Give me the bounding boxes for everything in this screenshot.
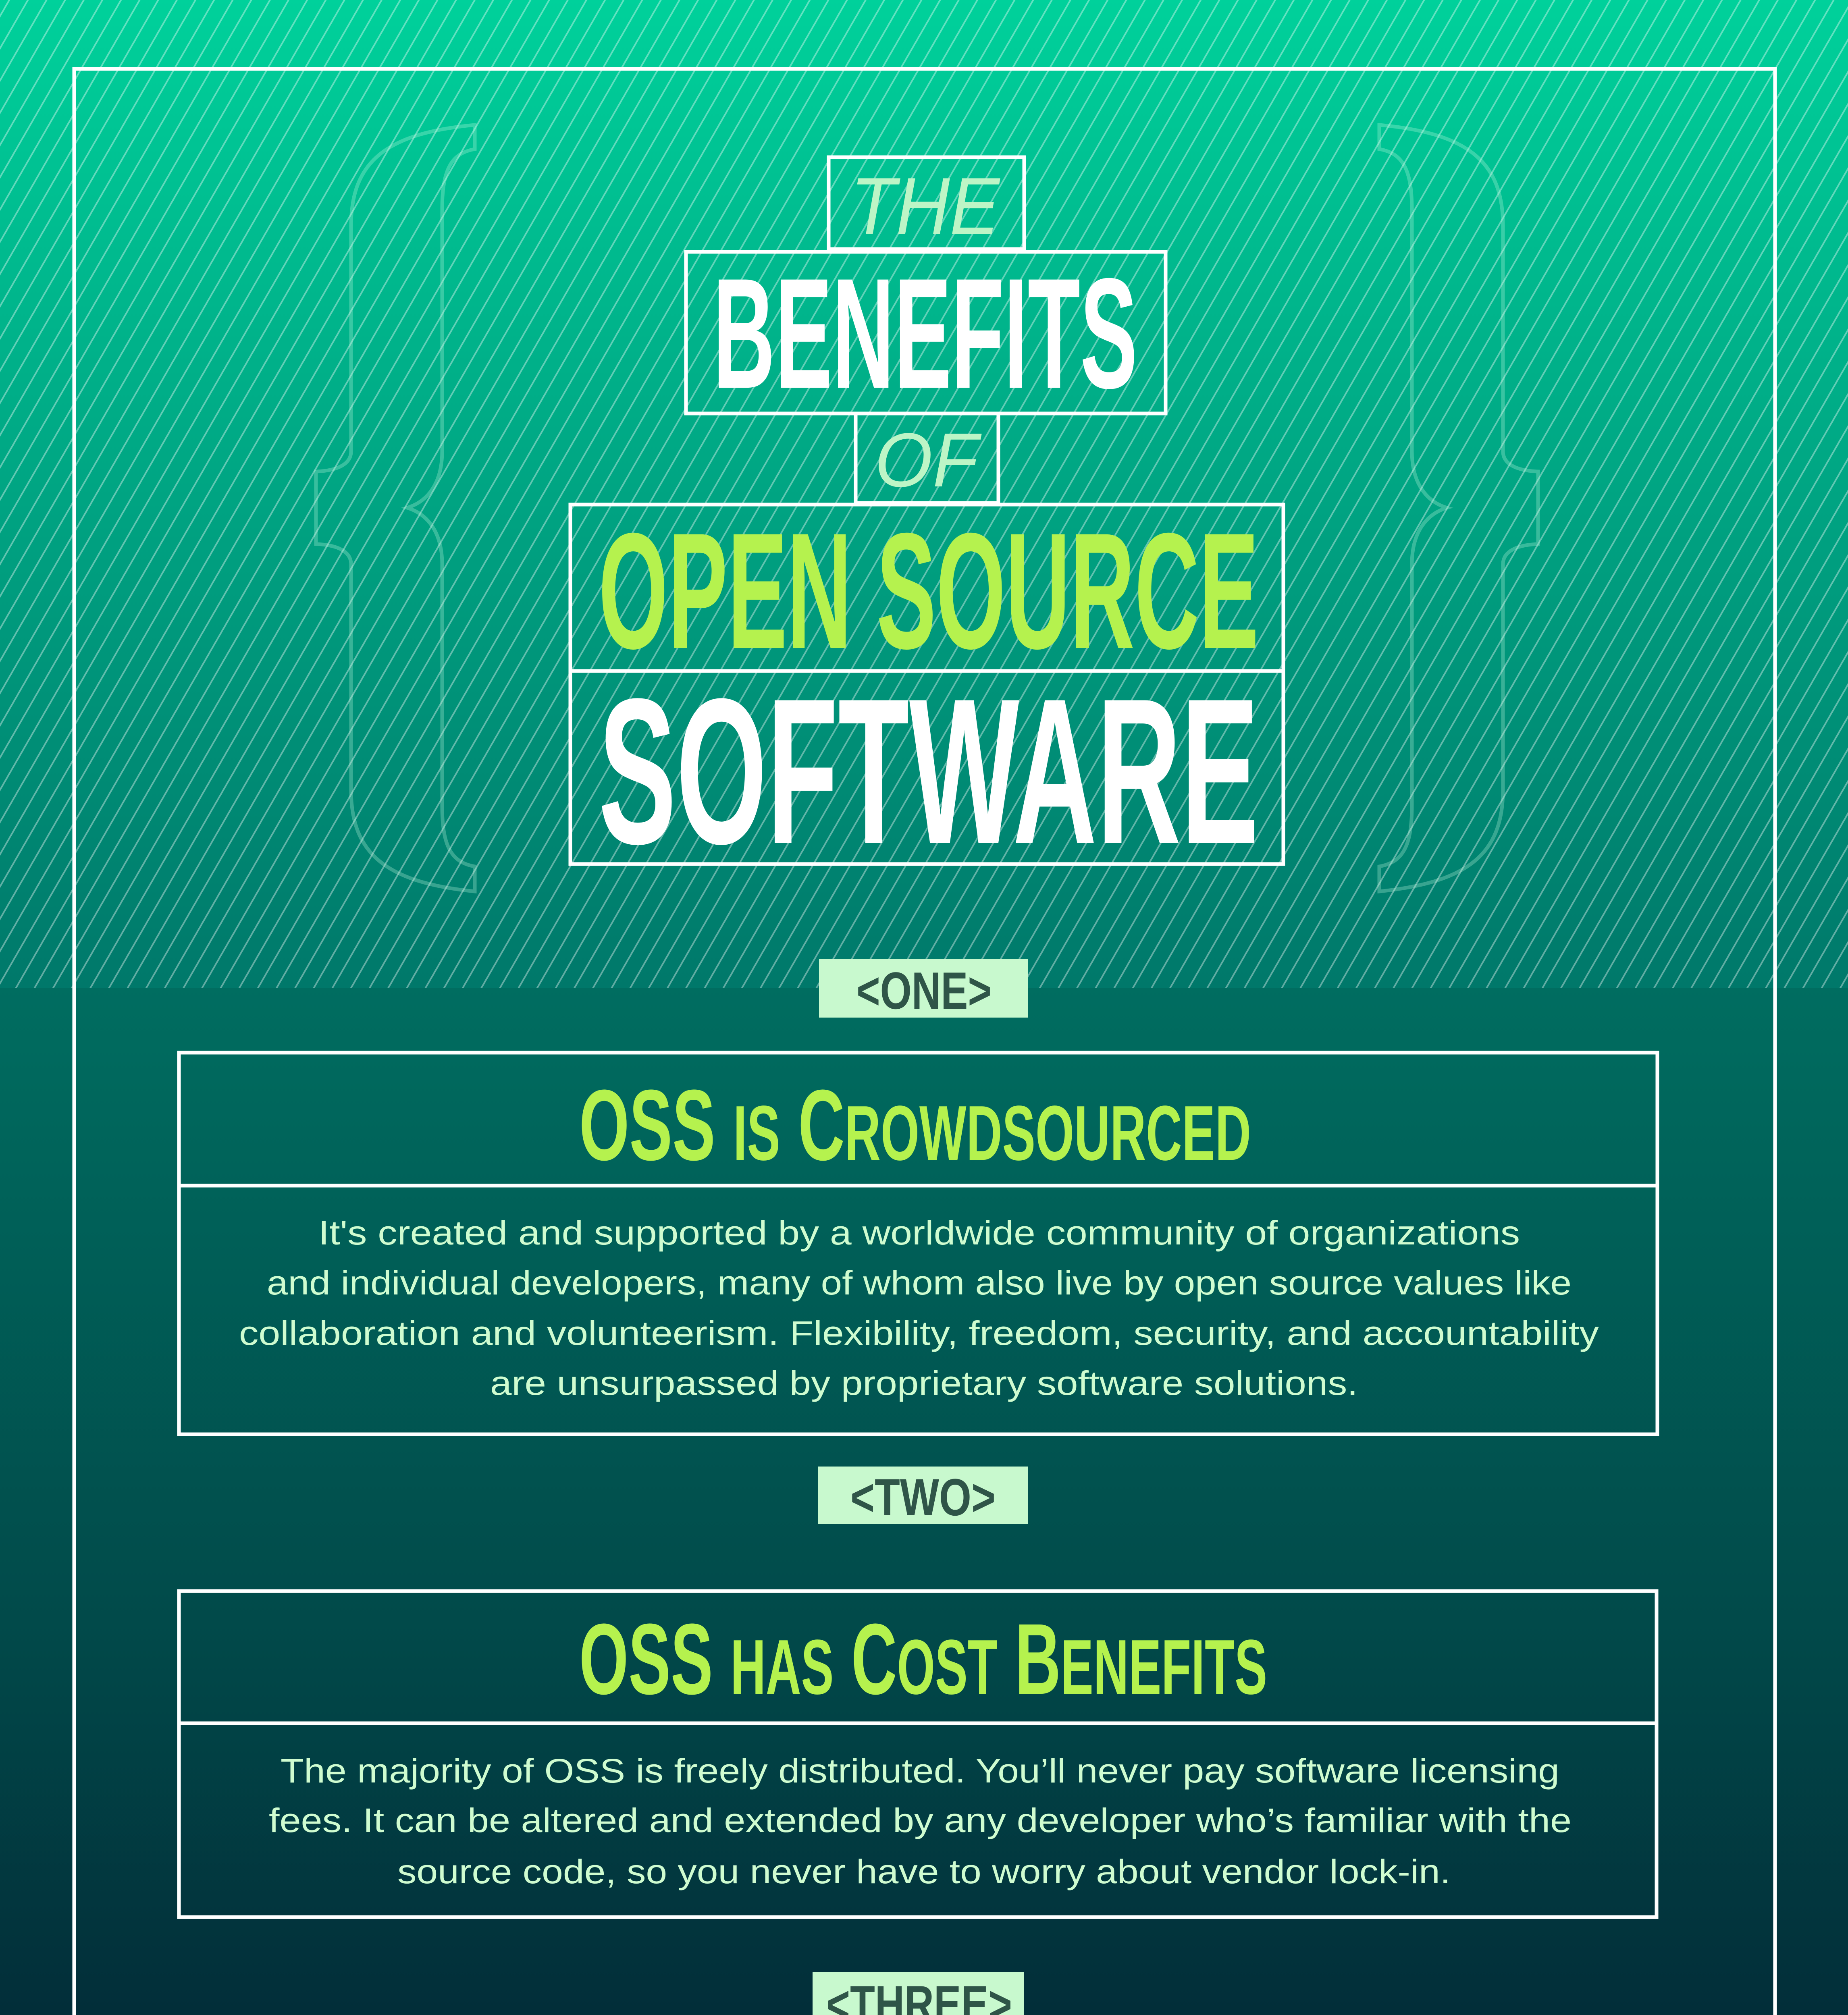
title: OF: [875, 418, 982, 503]
body text: [269, 1752, 1572, 1890]
icon: left curly brace: [316, 125, 475, 891]
body text: are unsurpassed by proprietary software solutions.: [490, 1364, 1358, 1402]
body text: source code, so you never have to worry about vendor lock-in.: [397, 1853, 1451, 1890]
panel: cost benefits: [179, 1591, 1657, 1917]
badge: one: <ONE>: [856, 961, 992, 1020]
title: [570, 157, 1283, 887]
badge: two: <TWO>: [850, 1468, 996, 1527]
body text: collaboration and volunteerism. Flexibility, freedom, security, and accountability: [239, 1314, 1599, 1352]
body text: [239, 1214, 1599, 1402]
panel: crowdsourced: [179, 1053, 1657, 1434]
title: SOFTWARE: [599, 656, 1259, 887]
icon: right curly brace: [1379, 125, 1538, 891]
heading: OSS is Crowdsourced: OSS IS CROWDSOURCED: [579, 1069, 1251, 1181]
body text: It's created and supported by a worldwide community of organizations: [318, 1214, 1520, 1252]
title: THE: [850, 161, 1000, 251]
body text: and individual developers, many of whom also live by open source values like: [267, 1264, 1572, 1302]
body text: fees. It can be altered and extended by any developer who’s familiar with the: [269, 1801, 1572, 1839]
body text: The majority of OSS is freely distributed. You’ll never pay software licensing: [281, 1752, 1559, 1790]
title: BENEFITS: [713, 245, 1137, 421]
heading: OSS has Cost Benefits: OSS HAS COST BENEFITS: [579, 1603, 1267, 1715]
title: OPEN SOURCE: [599, 499, 1259, 683]
